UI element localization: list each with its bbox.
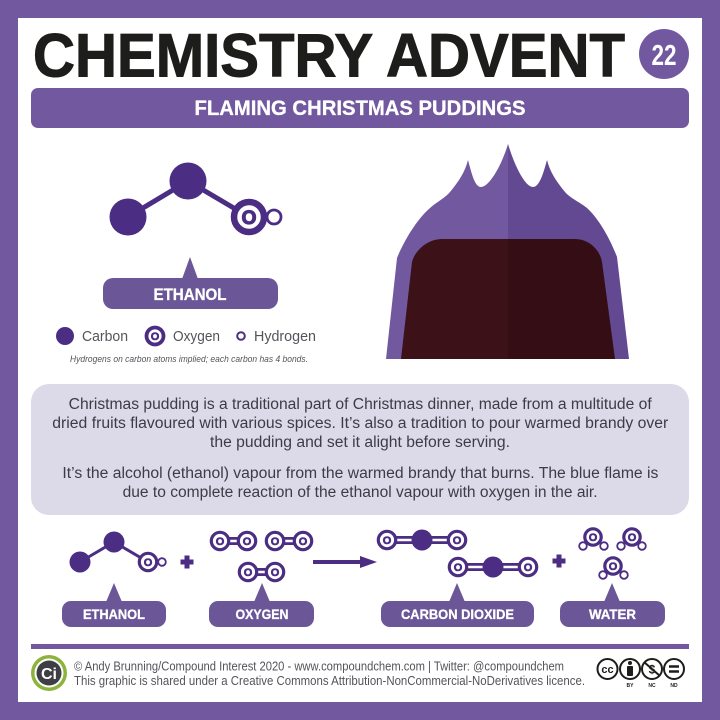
- legend: Oxygen: [173, 328, 220, 345]
- explanation panel: [31, 384, 689, 515]
- legend: Hydrogen: [254, 328, 316, 345]
- plus sign: [180, 556, 194, 568]
- reactant: oxygen molecules: O: [271, 567, 280, 579]
- creative commons icons: NC: [648, 683, 656, 689]
- explanation panel: It’s the alcohol (ethanol) vapour from the warmed brandy that burns. The blue flame is: [62, 465, 659, 482]
- credit text: © Andy Brunning/Compound Interest 2020 - www.compoundchem.com | Twitter: @compoundchem: [74, 658, 564, 674]
- creative commons icons: [598, 659, 684, 689]
- reaction arrow: [313, 556, 377, 568]
- product: water molecules: [579, 529, 646, 579]
- reactant: oxygen molecules: O: [216, 536, 225, 548]
- plus sign: [552, 554, 566, 568]
- ethanol label: ETHANOL: [154, 286, 226, 304]
- subtitle banner: [31, 88, 689, 128]
- legend: Carbon: [82, 328, 128, 345]
- explanation panel: the pudding and set it alight before serving.: [210, 434, 510, 451]
- label: ethanol: ETHANOL: [83, 607, 145, 622]
- legend note: Hydrogens on carbon atoms implied; each carbon has 4 bonds.: [70, 354, 308, 364]
- product: water molecules: O: [589, 532, 598, 544]
- compound interest logo: [31, 655, 67, 691]
- credit text: This graphic is shared under a Creative Commons Attribution-NonCommercial-NoDerivatives licence.: [74, 673, 585, 688]
- product: carbon dioxide molecules: O: [453, 535, 462, 547]
- label: oxygen: OXYGEN: [236, 607, 288, 622]
- product: carbon dioxide molecules: O: [383, 535, 392, 547]
- explanation panel: Christmas pudding is a traditional part of Christmas dinner, made from a multitude of: [69, 396, 652, 413]
- compound interest logo: Ci: [41, 666, 57, 683]
- pudding: [401, 239, 615, 359]
- product: carbon dioxide molecules: [378, 530, 537, 578]
- product: water molecules: O: [628, 532, 637, 544]
- title: CHEMISTRY ADVENT: [33, 22, 625, 90]
- creative commons icons: BY: [627, 683, 634, 689]
- day number badge: [639, 29, 689, 79]
- ethanol label: [103, 257, 278, 309]
- label: water: [560, 583, 665, 627]
- subtitle banner: FLAMING CHRISTMAS PUDDINGS: [194, 97, 526, 120]
- flaming pudding illustration: [386, 144, 629, 359]
- product: carbon dioxide molecules: O: [454, 562, 463, 574]
- label: water: WATER: [589, 607, 636, 622]
- reactant: oxygen molecules: [211, 532, 312, 581]
- label: ethanol: [62, 583, 166, 627]
- ethanol molecule: O: [242, 208, 256, 229]
- label: oxygen: [209, 583, 314, 627]
- reactant: oxygen molecules: O: [271, 536, 280, 548]
- reactant: oxygen molecules: O: [243, 536, 252, 548]
- creative commons icons: ND: [670, 683, 678, 689]
- ethanol molecule: [110, 162, 281, 236]
- creative commons icons: $: [649, 662, 656, 676]
- reactant: oxygen molecules: O: [299, 536, 308, 548]
- explanation panel: due to complete reaction of the ethanol vapour with oxygen in the air.: [123, 484, 598, 501]
- product: carbon dioxide molecules: O: [524, 562, 533, 574]
- legend: [56, 327, 316, 345]
- day number badge: 22: [652, 40, 676, 72]
- explanation panel: dried fruits flavoured with various spices. It’s also a tradition to pour warmed brandy over: [52, 415, 668, 432]
- flame: [386, 144, 629, 359]
- label: carbon dioxide: CARBON DIOXIDE: [401, 607, 514, 622]
- reactant: ethanol molecule: [70, 532, 166, 572]
- legend: O: [151, 331, 160, 343]
- credit text: [74, 658, 585, 688]
- reactant: ethanol molecule: O: [144, 557, 153, 569]
- creative commons icons: cc: [601, 664, 614, 676]
- product: water molecules: O: [609, 561, 618, 573]
- label: carbon dioxide: [381, 583, 534, 627]
- reactant: oxygen molecules: O: [244, 567, 253, 579]
